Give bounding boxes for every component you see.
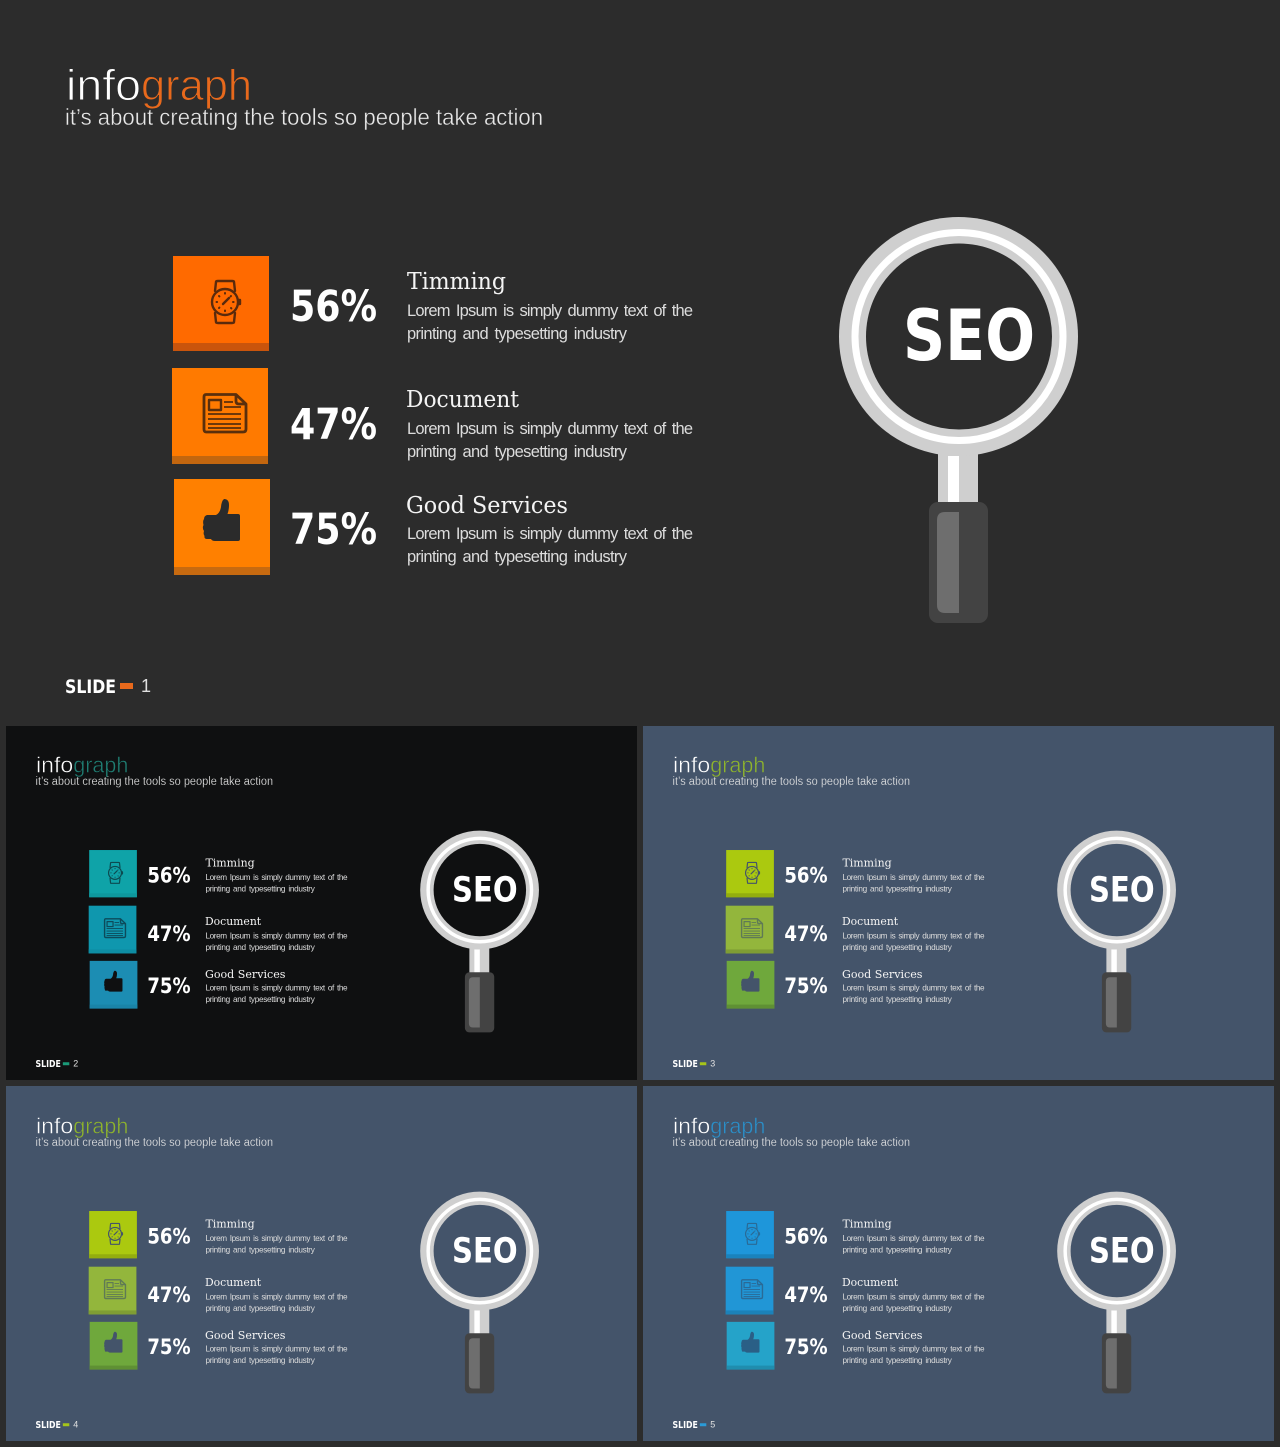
slide 2 text block: Timming: Timming	[205, 855, 255, 869]
panel: slide 1	[65, 61, 1078, 698]
slide 3 content	[673, 752, 1176, 1070]
slide 5 text block: Document: Document	[842, 1275, 899, 1289]
slide 3 SEO label: SEO	[1089, 871, 1155, 911]
slide 2 text block: Good Services: Good Services	[205, 967, 286, 981]
slide 5 text block: Timming	[842, 1216, 985, 1254]
slide 2 title: info	[36, 752, 73, 777]
slide 1 badge: thumbs up	[174, 479, 270, 575]
slide 1 text block: Document: Document	[406, 387, 520, 413]
slide 1 text block: Timming: Timming	[407, 269, 506, 295]
slide 3 title	[673, 752, 765, 778]
slide 4 text block: Timming: Timming	[205, 1216, 255, 1230]
slide 3 text block: Document: Document	[842, 914, 899, 928]
slide 4 badge: document	[89, 1267, 136, 1314]
slide 4 background	[6, 1086, 637, 1441]
slide 4 badge: thumbs up	[90, 1322, 137, 1370]
slide 4 text block: Timming: Lorem Ipsum is simply dummy text of the	[205, 1234, 348, 1243]
slide 5 text block: Good Services	[842, 1328, 985, 1365]
slide 1 text block: Document	[406, 387, 693, 461]
slide 3 text block: Good Services: Lorem Ipsum is simply dummy text of the	[842, 984, 985, 993]
slide 2 magnifying glass	[420, 831, 539, 1032]
panel: slide 5	[643, 1086, 1274, 1441]
slide 2 text block: Timming: Lorem Ipsum is simply dummy text of the	[205, 873, 348, 882]
panel: slide 3	[643, 726, 1274, 1080]
slide 2 text block: Document: Lorem Ipsum is simply dummy text of the	[205, 931, 348, 940]
slide 4 content	[36, 1114, 539, 1431]
slide 3 percent 75: 75%	[784, 974, 828, 999]
slide 4 text block: Document: Lorem Ipsum is simply dummy text of the	[205, 1292, 348, 1301]
slide 1 text block: Timming: Lorem Ipsum is simply dummy text of the	[407, 302, 693, 320]
slide 5 title	[673, 1114, 765, 1138]
slide 2 percent 47: 47%	[147, 922, 191, 947]
slide 1 text block: Document: Lorem Ipsum is simply dummy text of the	[407, 420, 693, 438]
slide 3 percent 56: 56%	[784, 863, 828, 888]
slide 1 percent 56: 56%	[290, 282, 377, 332]
slide 5 text block: Timming: printing and typesetting industry	[842, 1245, 953, 1254]
slide 2 text block: Good Services: Lorem Ipsum is simply dummy text of the	[205, 984, 348, 993]
slide 4 text block: Good Services	[205, 1328, 348, 1365]
slide 2 content	[36, 752, 539, 1070]
slide 5 text block: Document: printing and typesetting industry	[842, 1304, 953, 1313]
slide 2 footer: SLIDE	[36, 1059, 61, 1070]
slide 3 text block: Good Services: printing and typesetting industry	[842, 995, 953, 1004]
slide 1 badge: document	[172, 368, 268, 464]
slide 2 footer	[36, 1059, 78, 1070]
slide 2 badge: document	[89, 906, 136, 953]
slide 1 subtitle: it’s about creating the tools so people take action	[65, 104, 543, 130]
slide 3 percent 47: 47%	[784, 922, 828, 947]
slide 3 background	[643, 726, 1274, 1080]
slide 2 text block: Good Services	[205, 967, 348, 1004]
slide 2 badge: watch	[89, 850, 137, 897]
slide 5 title: graph	[710, 1114, 765, 1139]
slide 2 percent 75: 75%	[147, 974, 191, 999]
slide 1 text block: Good Services: Lorem Ipsum is simply dummy text of the	[407, 525, 693, 543]
slide 4 SEO label: SEO	[452, 1232, 518, 1272]
slide 4 text block: Timming: printing and typesetting industry	[205, 1245, 316, 1254]
slide 1 footer: 1	[141, 676, 151, 696]
slide 1 text block: Good Services	[406, 493, 693, 566]
slide 4 text block: Document	[205, 1275, 348, 1313]
slide 5 percent 47: 47%	[784, 1283, 828, 1308]
slide 5 background	[643, 1086, 1274, 1441]
slide 3 text block: Document	[842, 914, 985, 952]
slide 5 text block: Good Services: printing and typesetting industry	[842, 1356, 953, 1365]
slide 5 badge: document	[726, 1267, 773, 1314]
slide 4 badge: watch	[89, 1211, 137, 1258]
slide 2 subtitle: it’s about creating the tools so people take action	[36, 775, 273, 788]
slide 5 text block: Document: Lorem Ipsum is simply dummy text of the	[842, 1292, 985, 1301]
slide 3 badge: document	[726, 906, 773, 953]
slide 3 footer	[673, 1059, 715, 1070]
slide 4 text block: Good Services: Lorem Ipsum is simply dummy text of the	[205, 1345, 348, 1354]
slide 4 percent 56: 56%	[147, 1224, 191, 1249]
slide 3 text block: Timming	[842, 855, 985, 893]
slide 4 text block: Timming	[205, 1216, 348, 1254]
slide 2 text block: Timming: printing and typesetting industry	[205, 884, 316, 893]
slide 5 badge: watch	[726, 1211, 774, 1258]
slide 2 badge: thumbs up	[90, 961, 137, 1009]
slide 2 text block: Document	[205, 914, 348, 952]
slide 4 footer	[36, 1420, 78, 1431]
slide 1 text block: Good Services: printing and typesetting industry	[407, 548, 628, 566]
slide 5 title: info	[673, 1114, 710, 1139]
slide 4 text block: Document: printing and typesetting industry	[205, 1304, 316, 1313]
slide 3 footer: SLIDE	[673, 1059, 698, 1070]
slide 2 text block: Good Services: printing and typesetting industry	[205, 995, 316, 1004]
slide 5 text block: Document	[842, 1275, 985, 1313]
slide 2 title: graph	[73, 752, 128, 777]
slide 3 text block: Timming: Timming	[842, 855, 892, 869]
slide 1 text block: Document: printing and typesetting industry	[407, 443, 628, 461]
slide 1 title: info	[66, 61, 141, 110]
slide 3 subtitle: it’s about creating the tools so people take action	[673, 775, 910, 788]
slide 5 text block: Timming: Lorem Ipsum is simply dummy text of the	[842, 1234, 985, 1243]
slide 5 text block: Timming: Timming	[842, 1216, 892, 1230]
slide 2 text block: Document: Document	[205, 914, 262, 928]
slide 2 percent 56: 56%	[147, 863, 191, 888]
slide 4 text block: Document: Document	[205, 1275, 262, 1289]
slide 5 footer: SLIDE	[673, 1420, 698, 1431]
slide 3 badge: watch	[726, 850, 774, 897]
slide 4 percent 75: 75%	[147, 1335, 191, 1360]
slide 4 text block: Good Services: Good Services	[205, 1328, 286, 1342]
slide 3 text block: Document: printing and typesetting industry	[842, 943, 953, 952]
slide 1 percent 75: 75%	[290, 505, 377, 555]
slide 1 title	[66, 61, 252, 110]
slide 5 badge: thumbs up	[727, 1322, 774, 1370]
slide 3 magnifying glass	[1057, 831, 1176, 1032]
slide 4 title: info	[36, 1114, 73, 1139]
slide 5 text block: Good Services: Good Services	[842, 1328, 923, 1342]
slide 3 title: info	[673, 752, 710, 777]
slide 2 footer: 2	[73, 1059, 78, 1069]
slide 4 footer: SLIDE	[36, 1420, 61, 1431]
slide 5 footer	[673, 1420, 715, 1431]
slide 2 title	[36, 752, 128, 778]
slide 1 text block: Good Services: Good Services	[406, 493, 568, 519]
panel: slide 4	[6, 1086, 637, 1441]
slide 1 percent 47: 47%	[290, 400, 377, 450]
slide 5 SEO label: SEO	[1089, 1232, 1155, 1272]
slide 3 text block: Document: Lorem Ipsum is simply dummy text of the	[842, 931, 985, 940]
slide 4 magnifying glass	[420, 1192, 539, 1393]
slide 5 text block: Good Services: Lorem Ipsum is simply dummy text of the	[842, 1345, 985, 1354]
slide 5 subtitle: it’s about creating the tools so people take action	[673, 1136, 910, 1149]
slide 2 SEO label: SEO	[452, 871, 518, 911]
slide 3 text block: Good Services	[842, 967, 985, 1004]
slide 5 footer: 5	[710, 1420, 715, 1430]
slide 3 text block: Timming: Lorem Ipsum is simply dummy text of the	[842, 873, 985, 882]
slide 4 footer: 4	[73, 1420, 78, 1430]
slide 3 badge: thumbs up	[727, 961, 774, 1009]
slide 5 content	[673, 1114, 1176, 1431]
slide 4 title: graph	[73, 1114, 128, 1139]
slide 1 magnifying glass	[839, 217, 1078, 623]
slide 1 badge: watch	[173, 256, 269, 351]
slide 4 percent 47: 47%	[147, 1283, 191, 1308]
slide 4 title	[36, 1114, 128, 1138]
slide 1 SEO label: SEO	[903, 295, 1035, 377]
slide 2 background	[6, 726, 637, 1080]
slide 5 percent 75: 75%	[784, 1335, 828, 1360]
slide 5 magnifying glass	[1057, 1192, 1176, 1393]
slide 2 text block: Document: printing and typesetting industry	[205, 943, 316, 952]
slide 3 text block: Good Services: Good Services	[842, 967, 923, 981]
slide 3 footer: 3	[710, 1059, 715, 1069]
slide 2 text block: Timming	[205, 855, 348, 893]
panel: slide 2	[6, 726, 637, 1080]
slide 4 subtitle: it’s about creating the tools so people take action	[36, 1136, 273, 1149]
slide 4 text block: Good Services: printing and typesetting industry	[205, 1356, 316, 1365]
slide 3 title: graph	[710, 752, 765, 777]
slide 1 title: graph	[141, 61, 252, 110]
slide 1 footer: SLIDE	[65, 676, 116, 698]
slide 5 percent 56: 56%	[784, 1224, 828, 1249]
slide 3 text block: Timming: printing and typesetting industry	[842, 884, 953, 893]
slide 1 text block: Timming	[407, 269, 693, 343]
slide 1 text block: Timming: printing and typesetting industry	[407, 325, 628, 343]
